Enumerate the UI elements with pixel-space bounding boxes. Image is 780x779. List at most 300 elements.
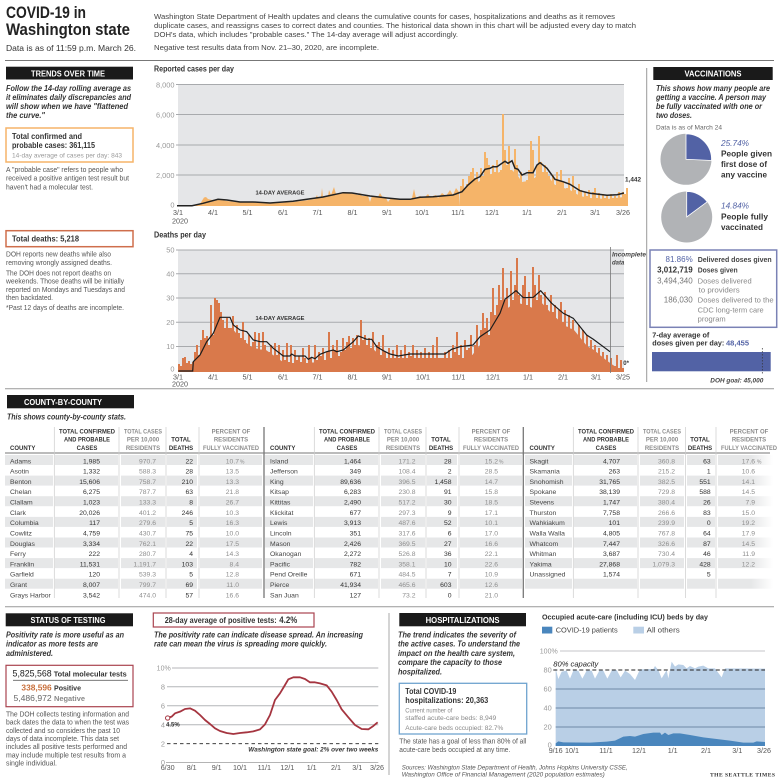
callout: total hospitalizations	[399, 683, 527, 734]
callout: total hospitalizations: Acute-care beds occupied: 82.7%	[405, 725, 503, 732]
table: Skagit to Unassigned: 1,574	[603, 572, 620, 579]
table: Skagit to Unassigned: 19.2	[742, 520, 755, 527]
table: Skagit to Unassigned: FULLY VACCINATED	[721, 446, 778, 452]
table: Island to San Juan: 2,426	[344, 541, 361, 548]
vaccination intro: getting a vaccine. A person may	[655, 93, 767, 102]
table: Island to San Juan: 9	[448, 510, 452, 517]
positivity x axis: 8/1	[187, 763, 197, 772]
table: Island to San Juan: 15.8	[485, 489, 498, 496]
table: Island to San Juan: CASES	[337, 446, 357, 452]
table: Adams to Grays Harbor: Cowlitz	[10, 530, 33, 538]
table: Adams to Grays Harbor: DEATHS	[169, 446, 193, 452]
chart: deaths per day: Deaths per day	[154, 230, 206, 239]
cases x axis: 2020	[172, 216, 188, 225]
beds x axis: 2/1	[701, 746, 711, 755]
table: Adams to Grays Harbor: 8,007	[83, 582, 100, 589]
table: Adams to Grays Harbor: Benton	[10, 479, 32, 486]
beds x axis: 11/1	[599, 746, 613, 755]
table: Adams to Grays Harbor: 16.6	[226, 592, 239, 599]
table: Skagit to Unassigned: PERCENT OF	[730, 429, 769, 435]
table: Skagit to Unassigned: RESIDENTS	[645, 446, 679, 452]
table: Island to San Juan: 127	[350, 592, 361, 599]
table: Skagit to Unassigned: 215.2	[658, 469, 675, 476]
deaths y axis: 50	[166, 246, 174, 254]
table: Adams to Grays Harbor: 1,023	[83, 500, 100, 506]
deaths x axis: 10/1	[416, 372, 430, 381]
positivity x axis: 3/26	[370, 763, 384, 772]
table: Skagit to Unassigned: Yakima	[530, 561, 552, 568]
callout: molecular tests: 5,486,972	[13, 693, 52, 703]
table: Skagit to Unassigned: 380.4	[658, 500, 675, 506]
table: Skagit to Unassigned: 239.9	[658, 520, 675, 527]
table: Skagit to Unassigned: TOTAL CONFIRMED	[578, 429, 635, 435]
table: Skagit to Unassigned: PER 10,000	[646, 438, 679, 444]
table: Adams to Grays Harbor: 103	[182, 561, 193, 568]
table: Skagit to Unassigned: AND PROBABLE	[583, 438, 629, 444]
beds y axis	[540, 648, 558, 750]
table: Skagit to Unassigned: TOTAL CASES	[643, 429, 681, 435]
beds x axis: 9/16	[549, 746, 563, 755]
table: Island to San Juan: RESIDENTS	[386, 446, 420, 452]
table: Skagit to Unassigned: 382.5	[658, 479, 675, 486]
callout: total deaths	[6, 231, 133, 247]
table: Island to San Juan: DEATHS	[429, 446, 453, 452]
table: Adams to Grays Harbor: 430.7	[139, 530, 156, 538]
table: Island to San Juan: 22.6	[485, 561, 498, 568]
goal line: Washington state goal: 2% over two weeks	[248, 747, 379, 754]
table: Skagit to Unassigned: 83	[703, 510, 711, 517]
cases x axis: 2/1	[557, 208, 567, 217]
chart: occupied beds	[540, 613, 771, 755]
deaths x axis: 8/1	[348, 372, 358, 381]
table: Adams to Grays Harbor: RESIDENTS	[214, 438, 248, 444]
callout: molecular tests: Total molecular tests	[54, 670, 127, 679]
note: probable case	[6, 167, 129, 192]
deaths bars	[178, 258, 624, 372]
table: Skagit to Unassigned: RESIDENTS	[732, 438, 766, 444]
table: Skagit to Unassigned: 326.6	[658, 541, 675, 548]
positivity x axis: 6/30	[161, 763, 175, 772]
table: Adams to Grays Harbor: 15,606	[79, 479, 100, 486]
legend: All others	[647, 625, 680, 634]
table: Adams to Grays Harbor: 10.7	[226, 458, 239, 465]
table: Skagit to Unassigned: Snohomish	[530, 479, 564, 486]
callout: molecular tests: Positive	[54, 683, 81, 692]
hospitalization intro: the active cases. To understand the	[398, 640, 521, 649]
note: probable case: haven't had a molecular test.	[6, 184, 93, 192]
table: Skagit to Unassigned: COUNTY	[530, 446, 555, 452]
note: deaths: reported on Mondays and Tuesdays and	[6, 287, 125, 294]
panel: vaccinations	[650, 67, 777, 385]
table: Skagit to Unassigned: Unassigned	[530, 572, 566, 579]
table: Adams to Grays Harbor: 1,985	[83, 458, 100, 465]
table: Adams to Grays Harbor: 474.0	[139, 592, 156, 599]
table: Island to San Juan: King	[270, 479, 284, 486]
callout: 28-day average: 4.2%	[279, 615, 297, 625]
table: Skagit to Unassigned: 1,747	[603, 500, 620, 506]
deaths x axis: 7/1	[312, 372, 322, 381]
callout: total hospitalizations: hospitalizations: 20,363	[405, 696, 489, 705]
table: Island to San Juan: 10	[444, 561, 452, 568]
table: Adams to Grays Harbor: TOTAL CONFIRMED	[59, 429, 116, 435]
deaths x axis: 2/1	[558, 372, 568, 381]
table: Skagit to Unassigned: Whitman	[530, 551, 557, 558]
table: Island to San Juan: 396.5	[398, 479, 416, 486]
beds x axis	[549, 746, 771, 755]
cases x axis: 3/1	[173, 208, 183, 217]
table: Skagit to Unassigned: 5	[707, 572, 711, 579]
dose statistics box: 3,012,719	[657, 266, 693, 275]
table: Adams to Grays Harbor: PERCENT OF	[212, 429, 251, 435]
table: Adams to Grays Harbor	[5, 429, 262, 599]
callout: molecular tests	[6, 665, 133, 707]
table: Adams to Grays Harbor: 117	[89, 520, 100, 527]
table: Adams to Grays Harbor: Douglas	[10, 541, 36, 548]
beds y axis: 60	[543, 684, 552, 694]
dose statistics box: Doses given	[698, 266, 738, 275]
table: Skagit to Unassigned: 101	[609, 520, 620, 527]
table: Skagit to Unassigned: %	[757, 459, 762, 465]
table: Adams to Grays Harbor: 222	[89, 551, 100, 558]
title: COVID-19 in	[6, 4, 86, 22]
table: Skagit to Unassigned: 14.5	[742, 541, 755, 548]
cases x axis: 9/1	[382, 208, 392, 217]
table: Island to San Juan: 1,464	[344, 458, 361, 465]
cases x axis: 1/1	[522, 208, 532, 217]
table: Adams to Grays Harbor: Clark	[10, 510, 26, 517]
table: Skagit to Unassigned: 1,079.3	[652, 561, 675, 568]
table: Skagit to Unassigned: 360.8	[658, 458, 675, 465]
sources: Sources: Washington State Department of Health, Johns Hopkins University CSSE,	[402, 765, 628, 772]
table: Island to San Juan: 171.2	[398, 458, 416, 465]
callout: molecular tests: Negative	[54, 694, 85, 703]
table: Island to San Juan: 14.7	[485, 479, 498, 486]
table: Adams to Grays Harbor: 133.3	[139, 500, 156, 506]
table: Skagit to Unassigned: 27,868	[599, 561, 620, 568]
table: Island to San Juan: 358.1	[398, 561, 416, 568]
positivity x axis: 12/1	[280, 763, 294, 772]
table: Adams to Grays Harbor: 6,275	[83, 489, 100, 496]
beds x axis: 3/1	[732, 746, 742, 755]
positivity text	[154, 630, 363, 649]
pie: first dose	[660, 134, 772, 185]
table: Skagit to Unassigned: 551	[699, 479, 711, 486]
table: Island to San Juan: 297.3	[398, 510, 416, 517]
table: Skagit to Unassigned: Skagit	[530, 458, 549, 465]
pie: fully vaccinated	[661, 191, 768, 242]
positivity text: The positivity rate can indicate disease spread. An increasing	[154, 630, 363, 639]
table: Skagit to Unassigned	[525, 429, 778, 589]
table: Island to San Juan: 2,272	[344, 551, 361, 558]
note: deaths: weekends. Those deaths will be initially	[5, 279, 125, 286]
callout: total cases: probable cases: 361,115	[12, 141, 95, 150]
table: Adams to Grays Harbor: 11.0	[226, 582, 239, 589]
table: Skagit to Unassigned: 63	[703, 458, 711, 465]
cases y axis: 0	[170, 200, 174, 210]
hospital goal note: The state has a goal of less than 80% of all	[399, 738, 527, 745]
vaccination intro: Data is as of March 24	[656, 124, 722, 131]
chart: positivity rate	[157, 666, 384, 772]
pie: fully vaccinated: 14.84%	[721, 200, 750, 210]
cases y axis: 4,000	[156, 141, 174, 150]
table: Island to San Juan: 677	[350, 510, 361, 517]
table: Adams to Grays Harbor: Garfield	[10, 572, 34, 579]
heading: county-by-county: COUNTY-BY-COUNTY	[24, 397, 102, 407]
cases y axis: 2,000	[156, 171, 174, 180]
table: Island to San Juan: 671	[350, 572, 361, 579]
table: Adams to Grays Harbor: Columbia	[10, 520, 39, 527]
heading: status of testing	[6, 613, 133, 626]
table: Skagit to Unassigned: 0	[707, 520, 711, 527]
table: Island to San Juan: 108.4	[398, 469, 416, 476]
table: Skagit to Unassigned: 428	[699, 561, 711, 568]
beds y axis: 100%	[540, 648, 558, 656]
intro text	[154, 12, 636, 52]
deaths y axis: 20	[166, 318, 174, 327]
pie: first dose: 25.74%	[720, 138, 750, 148]
trends intro: it eliminates daily discrepancies and	[6, 93, 131, 102]
table: Skagit to Unassigned: Whatcom	[530, 541, 559, 548]
callout: 28-day average: 28-day average of positive tests:	[165, 616, 277, 625]
callout: total cases: Total confirmed and	[12, 132, 82, 141]
table: Skagit to Unassigned: 14.5	[742, 489, 755, 496]
table: Adams to Grays Harbor: 13.3	[226, 479, 239, 486]
table: Adams to Grays Harbor: PER 10,000	[127, 438, 160, 444]
doses per day bar: 48,455	[726, 339, 749, 348]
title	[6, 4, 136, 53]
table: Skagit to Unassigned: 7,447	[603, 541, 620, 548]
county intro: This shows county-by-county stats.	[7, 412, 126, 421]
cases x axis: 8/1	[348, 208, 358, 217]
table: Island to San Juan: 36	[444, 551, 452, 558]
table: Skagit to Unassigned: 7.9	[746, 500, 755, 506]
14-day average label: 14-DAY AVERAGE	[256, 190, 305, 196]
panel: trends over time	[5, 67, 133, 312]
vaccination intro: be fully vaccinated with one or	[656, 102, 763, 111]
testing intro: administered.	[6, 649, 53, 658]
incomplete data marker: data	[612, 260, 625, 266]
pie: fully vaccinated: vaccinated	[721, 222, 763, 232]
positivity text: rate can mean the virus is spreading more quickly.	[154, 640, 327, 649]
table: Island to San Juan: 12.6	[485, 582, 498, 589]
doses per day bar: doses given per day:	[652, 339, 724, 348]
table: Adams to Grays Harbor: 10.0	[226, 530, 239, 538]
table: Island to San Juan: PERCENT OF	[472, 429, 511, 435]
table: Adams to Grays Harbor: 3,542	[83, 592, 100, 599]
table: Adams to Grays Harbor: Grays Harbor	[10, 592, 52, 599]
positivity y axis: 0	[161, 758, 165, 767]
deaths x axis: 3/1	[591, 372, 601, 381]
table: Skagit to Unassigned: 1	[707, 469, 711, 476]
table: Island to San Juan: 2,490	[344, 500, 361, 506]
table: Island to San Juan: 22.1	[485, 551, 498, 558]
table: Island to San Juan: 782	[350, 561, 361, 568]
table: Island to San Juan: 351	[350, 530, 361, 538]
legend	[542, 625, 680, 634]
dose statistics box: 186,030	[664, 296, 693, 305]
incomplete data marker: Incomplete	[612, 253, 647, 259]
table: Island to San Juan: 91	[444, 489, 452, 496]
beds x axis: 1/1	[668, 746, 678, 755]
table: Adams to Grays Harbor: 4	[189, 551, 193, 558]
table: Adams to Grays Harbor: Franklin	[10, 561, 34, 568]
table: Adams to Grays Harbor: 762.1	[139, 541, 156, 548]
table: Skagit to Unassigned: 17.6	[742, 458, 755, 465]
table: Adams to Grays Harbor: 14.3	[226, 551, 239, 558]
hospitalization intro: impact on the health care system,	[398, 649, 515, 658]
table: Skagit to Unassigned: 266.6	[658, 510, 675, 517]
table: Skagit to Unassigned: TOTAL	[690, 438, 710, 444]
table: Island to San Juan: 18.5	[485, 500, 498, 506]
table: Island to San Juan: Klickitat	[270, 510, 294, 517]
table: Island to San Juan	[265, 429, 522, 599]
table: Island to San Juan: 517.2	[398, 500, 416, 506]
table: Adams to Grays Harbor: 75	[185, 530, 193, 538]
table: Adams to Grays Harbor: CASES	[77, 446, 97, 452]
callout: total hospitalizations: Total COVID-19	[405, 687, 457, 696]
deaths x axis	[172, 372, 630, 388]
table: Adams to Grays Harbor: 8	[189, 500, 193, 506]
table: Island to San Juan: 17.0	[485, 530, 498, 538]
table: Skagit to Unassigned: 10.6	[742, 469, 755, 476]
dose statistics box: program	[698, 315, 726, 324]
chart: reported cases per day	[154, 65, 642, 225]
table: Island to San Juan: 317.6	[398, 530, 416, 538]
deaths x axis: 2020	[172, 379, 188, 388]
trends intro: Follow the 14-day rolling average as	[6, 84, 132, 93]
note: deaths: *Past 12 days of deaths are incomplete.	[6, 305, 124, 312]
beds x axis: 3/26	[757, 746, 771, 755]
table: Adams to Grays Harbor: 758.7	[139, 479, 156, 486]
heading: hospitalizations: HOSPITALIZATIONS	[426, 615, 500, 625]
table: Adams to Grays Harbor: 17.5	[226, 541, 239, 548]
hospital goal note: acute-care beds occupied at any time.	[399, 747, 510, 754]
table: Island to San Juan: 603	[440, 582, 452, 589]
callout: total hospitalizations: Current number of	[405, 707, 452, 714]
deaths y axis: 0	[170, 364, 174, 374]
table: Island to San Juan: Pacific	[270, 561, 291, 568]
cases x axis: 11/1	[451, 208, 465, 217]
table: Adams to Grays Harbor: 246	[182, 510, 193, 517]
table: Adams to Grays Harbor: 210	[182, 479, 193, 486]
14-day average label: 14-DAY AVERAGE	[256, 316, 305, 322]
testing intro: indicator as more tests are	[6, 640, 99, 649]
table: Adams to Grays Harbor: 57	[185, 592, 193, 599]
beds y axis: 80	[543, 666, 552, 674]
panel: county-by-county	[5, 395, 778, 599]
table: Adams to Grays Harbor: 22	[185, 541, 193, 548]
deaths x axis: 5/1	[242, 372, 252, 381]
panel: hospitalizations	[398, 613, 771, 755]
testing notes: days of data incomplete. This data set	[6, 736, 119, 743]
table: Island to San Juan: TOTAL CASES	[384, 429, 422, 435]
table: Island to San Juan: TOTAL CONFIRMED	[319, 429, 376, 435]
trends intro: the curve."	[6, 111, 45, 120]
table: Island to San Juan: 0	[448, 592, 452, 599]
table: Adams to Grays Harbor: 787.7	[139, 489, 156, 496]
callout: total cases: 14-day average of cases per day: 843	[12, 153, 122, 160]
table: Adams to Grays Harbor: 120	[89, 572, 100, 579]
beds y axis: 0	[548, 740, 552, 750]
title: Data is as of 11:59 p.m. March 26.	[6, 43, 136, 53]
deaths y axis: 10	[166, 342, 174, 351]
table: Island to San Juan: 1,458	[434, 479, 452, 486]
positivity x axis: 1/1	[307, 763, 317, 772]
table: Adams to Grays Harbor: 16.3	[226, 520, 239, 527]
table: Island to San Juan: Okanogan	[270, 551, 302, 558]
table: Skagit to Unassigned: 4,805	[603, 530, 620, 538]
hospitalization intro	[398, 631, 521, 676]
pie: first dose: any vaccine	[721, 169, 767, 179]
table: Island to San Juan: RESIDENTS	[474, 438, 508, 444]
note: deaths: removing wrongly assigned deaths.	[6, 260, 112, 267]
table: Island to San Juan: 487.6	[398, 520, 416, 527]
heading: county-by-county	[7, 395, 134, 408]
dose statistics box: 81.86%	[666, 255, 693, 264]
deaths 14-day average line	[178, 291, 610, 371]
table: Adams to Grays Harbor: 539.3	[139, 572, 156, 579]
table: Skagit to Unassigned: Skamania	[530, 469, 560, 476]
cases x axis: 6/1	[278, 208, 288, 217]
testing notes: may include multiple test results from a	[6, 752, 126, 760]
table: Island to San Juan: COUNTY	[270, 446, 295, 452]
intro text: Washington State Department of Health updates and cleans the cumulative counts for cases, hospitalizations and deaths as it removes	[154, 12, 615, 21]
positivity x axis: 11/1	[258, 763, 271, 772]
table: Adams to Grays Harbor: 5	[189, 520, 193, 527]
table: Skagit to Unassigned: 15.0	[742, 510, 755, 517]
table: Skagit to Unassigned: 767.8	[658, 530, 675, 538]
table: Island to San Juan: 28	[444, 458, 452, 465]
heading: vaccinations: VACCINATIONS	[684, 69, 742, 79]
cases x axis: 12/1	[485, 208, 499, 217]
chart: deaths per day	[154, 230, 647, 388]
positivity x axis: 2/1	[331, 763, 341, 772]
table: Island to San Juan: Island	[270, 458, 288, 465]
logo: The Seattle Times: THE SEATTLE TIMES	[710, 773, 775, 779]
note: deaths	[5, 252, 125, 312]
positivity y axis	[157, 666, 171, 767]
table: Island to San Juan: Kittitas	[270, 500, 291, 506]
table: Adams to Grays Harbor: Adams	[10, 458, 32, 465]
table: Adams to Grays Harbor: FULLY VACCINATED	[203, 446, 260, 452]
table: Adams to Grays Harbor: Grant	[10, 582, 27, 589]
vaccination intro: two doses.	[656, 111, 692, 120]
doses per day bar: DOH goal: 45,000	[710, 378, 764, 385]
deaths x axis: 9/1	[382, 372, 392, 381]
table: Island to San Juan: Lincoln	[270, 530, 292, 538]
beds y axis: 20	[543, 722, 552, 732]
table: Skagit to Unassigned: 87	[703, 541, 711, 548]
doses per day bar	[652, 330, 771, 385]
note: probable case: A "probable case" refers to people who	[6, 167, 123, 174]
heading: trends over time	[6, 67, 133, 80]
dose statistics box: Doses delivered	[698, 276, 752, 285]
testing notes: collected and so considers the past 10	[6, 728, 120, 735]
table: Island to San Juan: 465.6	[398, 582, 416, 589]
table: Skagit to Unassigned: 64	[703, 530, 711, 538]
table: Skagit to Unassigned: CASES	[596, 446, 616, 452]
table: Island to San Juan: San Juan	[270, 592, 299, 599]
table: Skagit to Unassigned: DEATHS	[688, 446, 712, 452]
table: Adams to Grays Harbor: 401.2	[139, 510, 156, 517]
incomplete data marker	[610, 247, 647, 373]
deaths x axis: 1/1	[523, 372, 533, 381]
80 percent capacity line: 80% capacity	[553, 662, 599, 669]
cases x axis: 3/26	[616, 208, 630, 217]
table: Adams to Grays Harbor: 13.5	[226, 469, 239, 476]
dose statistics box	[650, 250, 777, 327]
sources: Washington Office of Financial Management (2020 population estimates)	[402, 772, 605, 779]
